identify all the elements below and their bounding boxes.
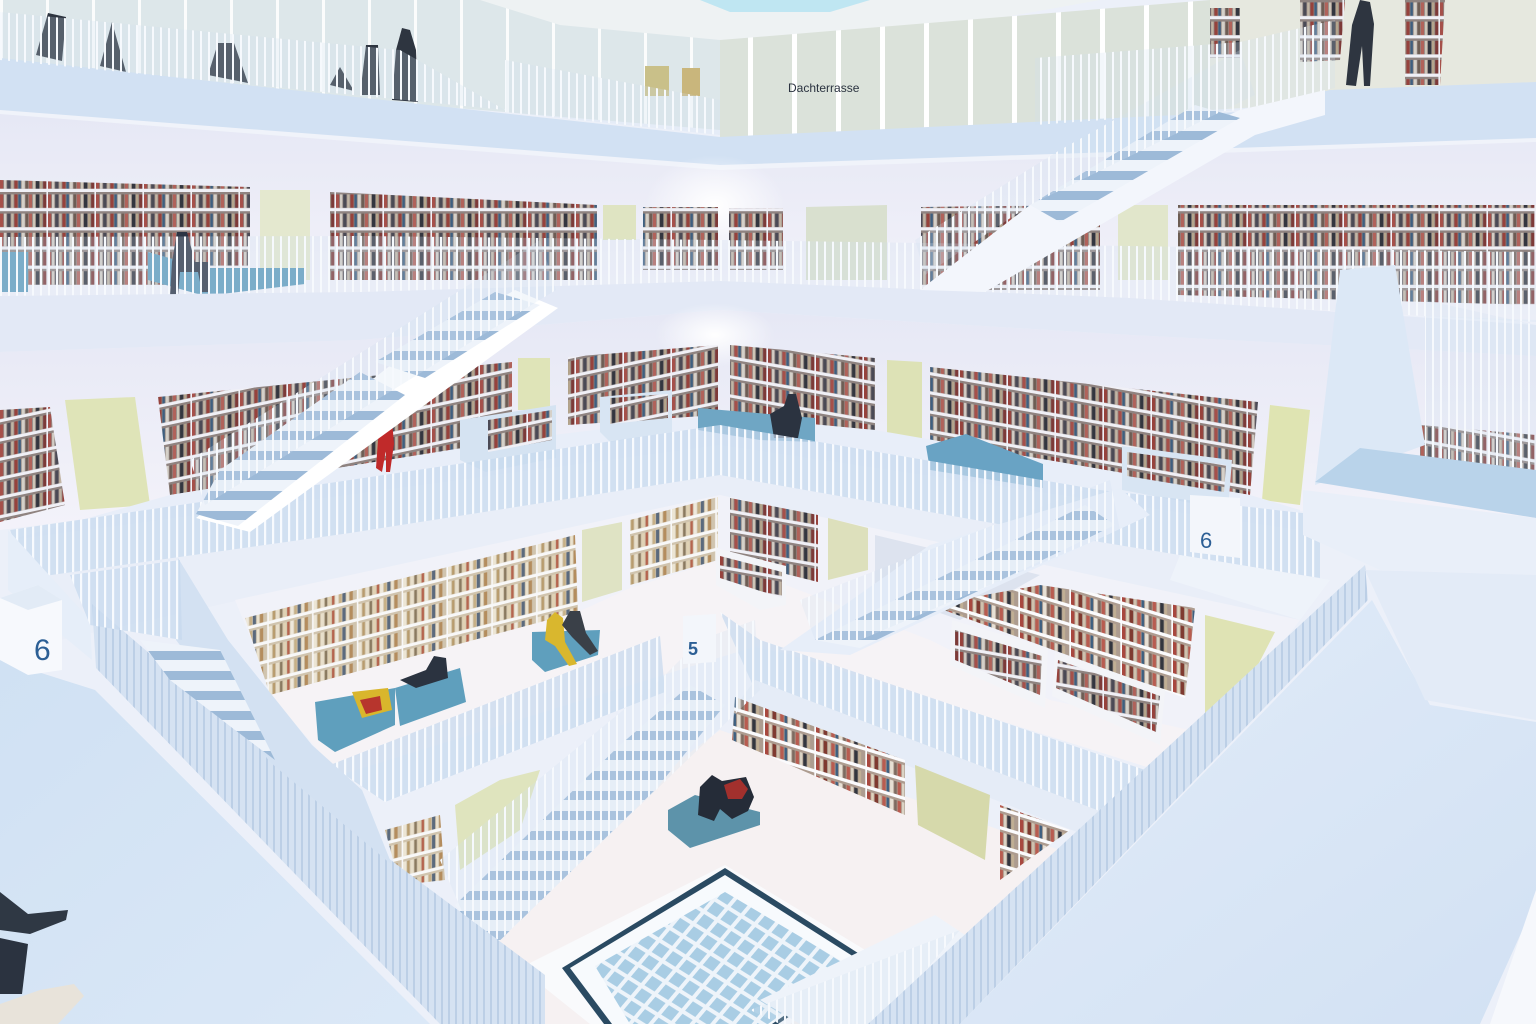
large floor, right foreground — [960, 600, 1536, 1024]
second floor wall — [235, 495, 1300, 760]
right bridge block with railing — [1303, 265, 1536, 720]
skylight on the ground floor — [520, 865, 885, 1024]
fourth floor railing — [0, 236, 1536, 322]
third floor walkway — [10, 415, 1300, 540]
central railing, right run — [720, 612, 1145, 828]
central railing, left run — [330, 636, 665, 802]
third floor free-standing shelves and sofas — [376, 390, 1232, 510]
third floor bookshelves and doors — [0, 345, 1536, 522]
central staircase to the right — [780, 480, 1150, 655]
fourth floor bookshelves — [0, 180, 1536, 305]
second floor sofas and readers — [315, 611, 600, 752]
stair-head block with number 6 — [1170, 495, 1330, 620]
fourth floor wall — [0, 114, 1536, 320]
central slab under right railing — [740, 680, 1118, 845]
ground floor surface — [440, 730, 1060, 1024]
third floor railing — [10, 425, 1320, 580]
landing block with number 5: 5 — [688, 639, 698, 659]
light glow, third floor — [655, 303, 775, 367]
top floor: glass wall and visitors — [0, 0, 1536, 138]
right fence, foreground — [868, 565, 1368, 1024]
sign: roof terrace: Dachterrasse — [788, 81, 860, 95]
bottom stair and rail near skylight — [750, 915, 965, 1024]
ground floor sofa and readers — [668, 775, 760, 848]
second floor bookshelves and doors — [245, 497, 1275, 720]
upper left staircase — [190, 240, 558, 532]
second floor walking surface — [270, 560, 1190, 775]
lower central staircase — [440, 620, 760, 950]
top balcony slab and railing — [0, 12, 1536, 172]
wall sliver, bottom right — [1490, 890, 1536, 1024]
fourth floor slab — [0, 281, 1536, 356]
visitor legs, bottom left — [0, 892, 84, 1024]
upper right staircase — [915, 50, 1325, 292]
large floor, left foreground — [0, 660, 430, 1024]
staircase in foreground left — [8, 530, 392, 865]
landing block with number 5 — [683, 614, 716, 664]
pillar block with number 6 — [0, 585, 62, 675]
pillar block with number 6: 6 — [34, 634, 51, 667]
light glow, fourth floor — [645, 155, 785, 255]
second floor free-standing bookcases — [716, 548, 1165, 745]
left fence, foreground — [92, 604, 545, 1024]
fourth floor sofas and visitors — [0, 232, 305, 296]
third floor wall — [0, 310, 1536, 540]
ground floor bookshelves and door — [385, 697, 1070, 885]
third floor slab — [30, 475, 1320, 640]
stair-head block with number 6: 6 — [1200, 528, 1212, 553]
